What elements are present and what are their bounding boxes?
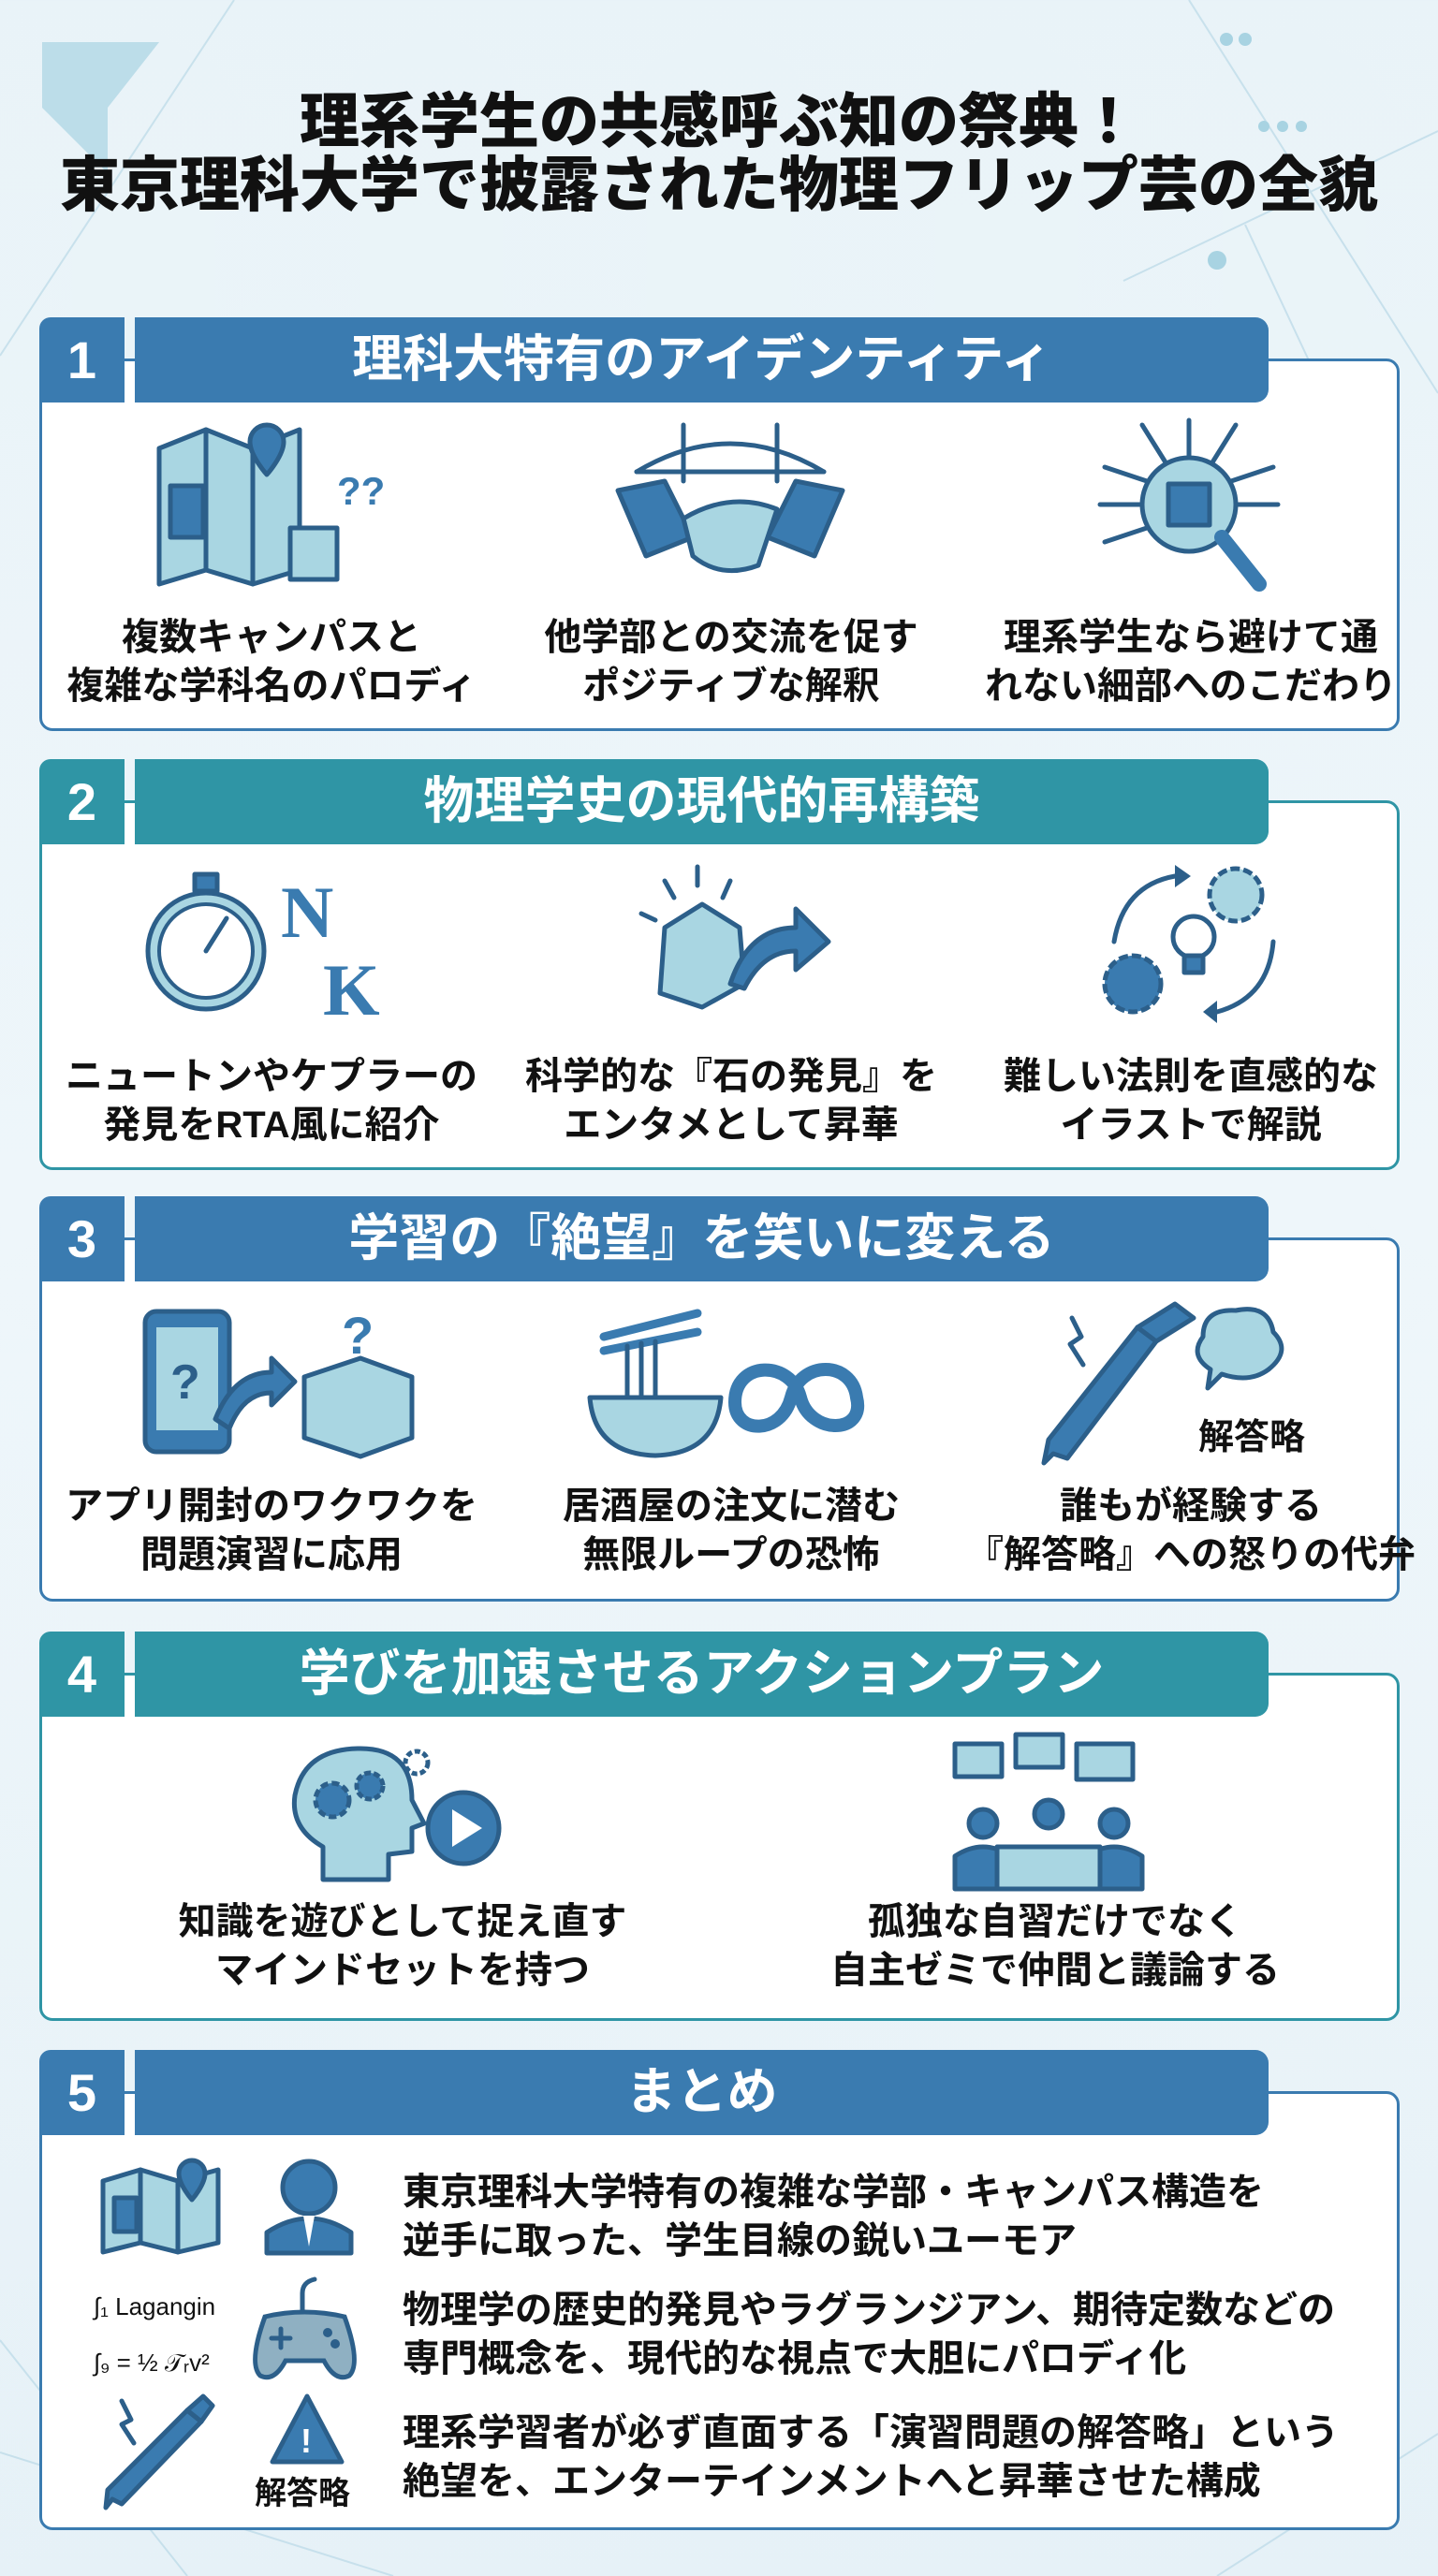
summary text 3: 理系学習者が必ず直面する「演習問題の解答略」という <box>403 2412 1339 2453</box>
number 1: 1 <box>67 330 96 389</box>
number 5 <box>39 2050 125 2135</box>
caption 4-2: 孤独な自習だけでなく <box>868 1901 1242 1942</box>
icon: phone to box: ? <box>170 1355 200 1410</box>
icon: glowing stone with arrow <box>638 865 831 1009</box>
icon: formula <box>92 2292 215 2377</box>
title: 理系学生の共感呼ぶ知の祭典！ <box>300 88 1138 155</box>
panel 5 <box>39 2091 1400 2530</box>
section 5 <box>39 2050 1400 2530</box>
icon: head with gears and play <box>292 1747 502 1881</box>
caption 2-2: エンタメとして昇華 <box>564 1105 899 1146</box>
icon: group discussion <box>953 1732 1144 1891</box>
heading 3 <box>135 1196 1269 1281</box>
icon: formula: ∫₉ = ½ 𝒯ᵣv² <box>92 2349 210 2377</box>
caption 1-1 <box>66 617 477 707</box>
caption 2-2: 科学的な『石の発見』を <box>525 1056 937 1097</box>
heading 5 <box>135 2050 1269 2135</box>
heading 1: 理科大特有のアイデンティティ <box>352 331 1051 388</box>
section 3 <box>39 1196 1416 1602</box>
icon: stopwatch N K: K <box>323 949 380 1031</box>
icon: phone to box <box>142 1306 414 1458</box>
caption 3-1: アプリ開封のワクワクを <box>66 1486 477 1527</box>
heading 2 <box>135 759 1269 844</box>
caption 3-1: 問題演習に応用 <box>140 1534 403 1575</box>
title: 東京理科大学で披露された物理フリップ芸の全貌 <box>60 152 1378 219</box>
heading 2: 物理学史の現代的再構築 <box>423 773 979 829</box>
number 4 <box>39 1632 125 1717</box>
caption 1-2 <box>544 617 918 707</box>
summary text 1: 逆手に取った、学生目線の鋭いユーモア <box>403 2220 1077 2261</box>
icon: broken pencil angry cloud <box>1041 1301 1305 1466</box>
caption 1-1: 複雑な学科名のパロディ <box>66 666 477 707</box>
heading 4: 学びを加速させるアクションプラン <box>300 1646 1104 1702</box>
icon: chip magnifier <box>1097 417 1281 592</box>
caption 4-2: 自主ゼミで仲間と議論する <box>830 1950 1280 1991</box>
number 3: 3 <box>67 1209 96 1268</box>
number 2 <box>39 759 125 844</box>
icon: warning with 解答略: ! <box>301 2422 312 2460</box>
caption 3-3: 誰もが経験する <box>1060 1486 1322 1527</box>
heading 3: 学習の『絶望』を笑いに変える <box>348 1210 1055 1266</box>
caption 3-2: 居酒屋の注文に潜む <box>563 1486 900 1527</box>
caption 2-3: 難しい法則を直感的な <box>1004 1056 1378 1097</box>
section 1 <box>39 317 1400 731</box>
icon: phone to box: ? <box>342 1306 374 1365</box>
caption 3-2 <box>563 1486 900 1575</box>
caption 3-1 <box>66 1486 477 1575</box>
caption 3-3 <box>966 1486 1416 1575</box>
summary text 2: 専門概念を、現代的な視点で大胆にパロディ化 <box>403 2338 1186 2379</box>
caption 4-2 <box>830 1901 1280 1991</box>
icon: stopwatch N K <box>146 871 380 1031</box>
caption 4-1: 知識を遊びとして捉え直す <box>179 1901 626 1942</box>
icon: person <box>264 2159 354 2256</box>
panel 4 <box>39 1673 1400 2021</box>
summary text 3 <box>403 2412 1339 2502</box>
icon: map <box>101 2159 221 2254</box>
icon: broken pencil angry cloud: 解答略 <box>1198 1418 1305 1457</box>
caption 2-3: イラストで解説 <box>1060 1105 1322 1146</box>
number 5: 5 <box>67 2063 96 2122</box>
panel 3 <box>39 1237 1400 1602</box>
caption 4-1 <box>179 1901 626 1991</box>
number 2: 2 <box>67 772 96 831</box>
caption 2-1: 発見をRTA風に紹介 <box>103 1105 440 1146</box>
caption 2-2 <box>525 1056 937 1146</box>
icon: warning with 解答略: 解答略 <box>255 2476 350 2511</box>
caption 2-1 <box>66 1056 477 1146</box>
summary text 1: 東京理科大学特有の複雑な学部・キャンパス構造を <box>403 2172 1264 2213</box>
caption 3-3: 『解答略』への怒りの代弁 <box>966 1534 1416 1575</box>
caption 1-2: ポジティブな解釈 <box>582 666 880 707</box>
icon: stopwatch N K: N <box>281 871 333 953</box>
icon: map with buildings <box>157 423 385 586</box>
icon: warning with 解答略 <box>255 2394 350 2511</box>
heading 1 <box>135 317 1269 402</box>
title <box>60 88 1378 219</box>
caption 1-1: 複数キャンパスと <box>122 617 421 658</box>
panel 2 <box>39 800 1400 1170</box>
icon: gears bulb cycle <box>1103 865 1275 1023</box>
caption 4-1: マインドセットを持つ <box>215 1950 590 1991</box>
icon: formula: ∫₁ Lagangin <box>92 2292 215 2320</box>
caption 1-3: れない細部へのこだわり <box>985 666 1397 707</box>
icon: handshake bridge <box>616 423 844 573</box>
caption 1-2: 他学部との交流を促す <box>544 617 918 658</box>
caption 1-3: 理系学生なら避けて通 <box>1004 617 1378 658</box>
summary text 2: 物理学の歴史的発見やラグランジアン、期待定数などの <box>403 2290 1335 2331</box>
icon: noodle bowl with infinity <box>588 1309 865 1458</box>
caption 2-3 <box>1004 1056 1378 1146</box>
section 2 <box>39 759 1400 1170</box>
section 4 <box>39 1632 1400 2021</box>
summary text 1 <box>403 2172 1264 2261</box>
caption 2-1: ニュートンやケプラーの <box>66 1056 477 1097</box>
heading 5: まとめ <box>625 2064 777 2120</box>
summary text 3: 絶望を、エンターテインメントへと昇華させた構成 <box>403 2461 1261 2502</box>
icon: map with buildings: ?? <box>337 469 385 513</box>
caption 3-2: 無限ループの恐怖 <box>582 1534 880 1575</box>
icon: game controller <box>253 2276 357 2379</box>
heading 4 <box>135 1632 1269 1717</box>
number 4: 4 <box>67 1645 96 1704</box>
icon: broken pencil <box>103 2394 215 2510</box>
caption 1-3 <box>985 617 1397 707</box>
summary text 2 <box>403 2290 1335 2379</box>
number 3 <box>39 1196 125 1281</box>
number 1 <box>39 317 125 402</box>
panel 1 <box>39 359 1400 731</box>
